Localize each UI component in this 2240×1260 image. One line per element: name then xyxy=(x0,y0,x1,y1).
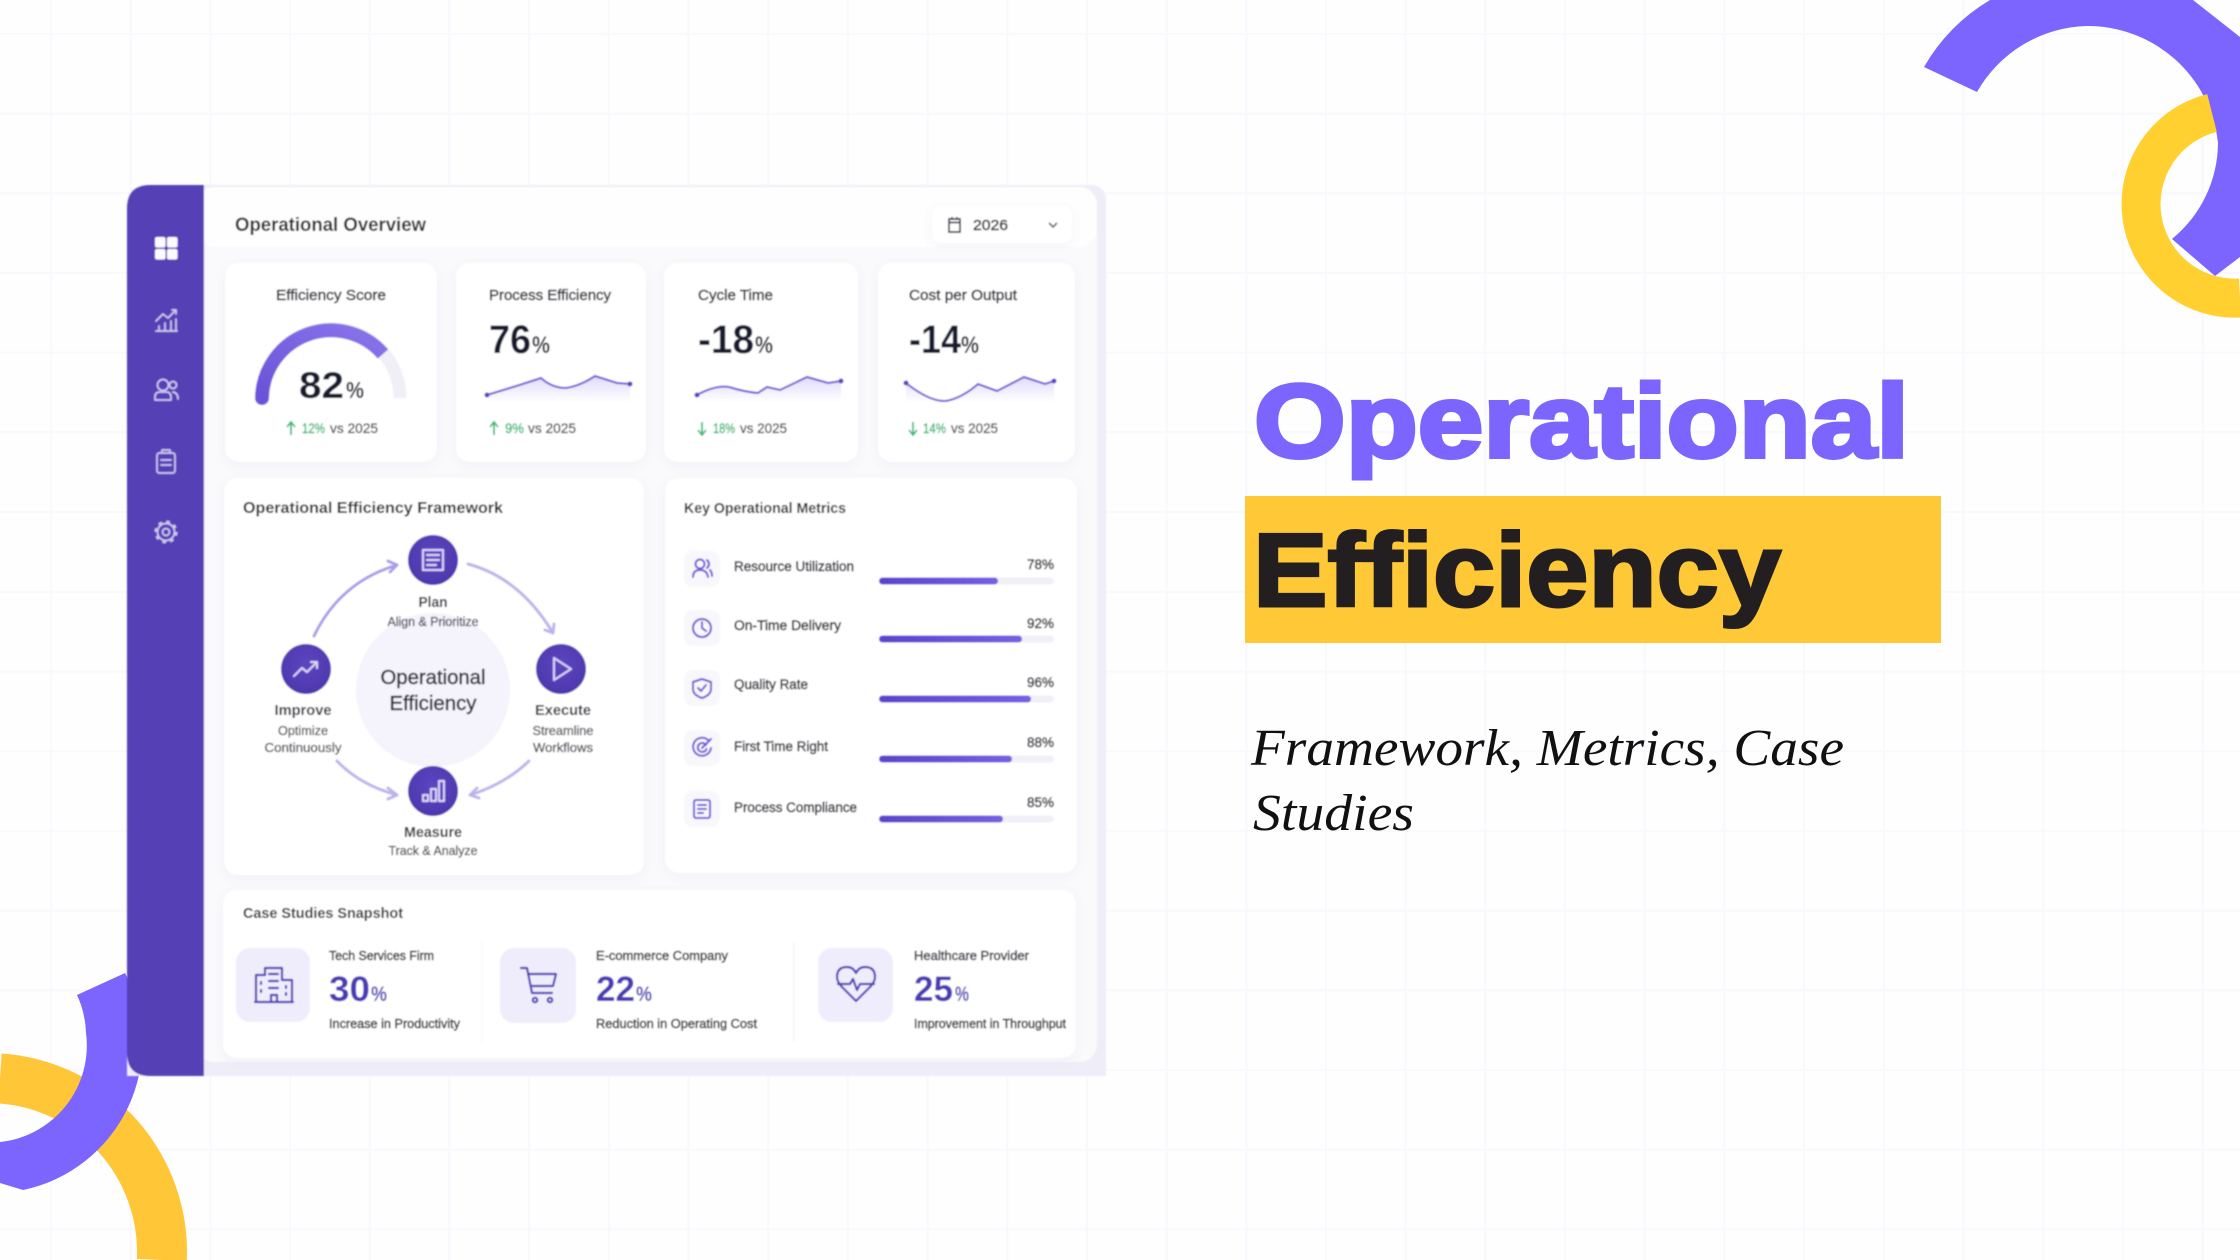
sidebar icon: gear xyxy=(156,522,176,542)
card: cost per output: Cost per Output xyxy=(909,287,1018,304)
metrics heading: Key Operational Metrics xyxy=(684,500,846,517)
gauge: 82 xyxy=(299,365,344,406)
card: cost per output xyxy=(878,263,1075,462)
title: Operational: Operational xyxy=(1254,364,1909,480)
panel: case studies snapshot xyxy=(223,890,1076,1058)
change vs 2025: 12% xyxy=(302,420,325,436)
case: e-commerce company: 22 xyxy=(596,970,635,1009)
change vs 2025: 14% xyxy=(923,420,946,436)
node: measure: Measure xyxy=(404,824,462,841)
metric: resource utilization: 78% xyxy=(1027,557,1054,572)
node: execute: Streamline xyxy=(532,724,594,738)
panel: key operational metrics xyxy=(665,478,1077,873)
arrow: improve to plan xyxy=(314,561,397,636)
dashboard frame xyxy=(127,185,1106,1076)
node: execute xyxy=(532,644,594,755)
dashboard main area xyxy=(196,187,1097,1062)
change vs 2025 xyxy=(287,420,378,436)
case: healthcare provider: Improvement in Throughput xyxy=(914,1016,1066,1031)
panel: framework xyxy=(224,478,644,875)
case: e-commerce company: % xyxy=(636,983,652,1006)
change vs 2025 xyxy=(490,420,576,436)
metric: resource utilization xyxy=(684,551,1054,587)
subtitle xyxy=(1250,720,1844,842)
node: measure: Track & Analyze xyxy=(388,844,478,858)
dashboard heading: Operational Overview xyxy=(235,215,426,236)
metric: first time right: First Time Right xyxy=(734,739,828,754)
node: improve xyxy=(264,644,342,755)
framework heading: Operational Efficiency Framework xyxy=(243,500,503,517)
case: healthcare provider: % xyxy=(955,983,969,1006)
case: tech services firm xyxy=(236,948,460,1031)
metric: first time right: 88% xyxy=(1027,735,1054,750)
card: process efficiency xyxy=(456,263,646,462)
metric: process compliance: Process Compliance xyxy=(734,800,857,815)
title highlight: Efficiency xyxy=(1245,496,1941,643)
sparkline xyxy=(694,377,844,402)
node: improve: Improve xyxy=(274,702,332,719)
case: tech services firm: Increase in Productivity xyxy=(329,1016,460,1031)
change vs 2025: vs 2025 xyxy=(740,420,787,436)
node: improve: Continuously xyxy=(264,741,342,755)
card: process efficiency: Process Efficiency xyxy=(489,287,611,304)
arrow: execute to measure xyxy=(470,761,529,798)
node: plan: Align & Prioritize xyxy=(388,615,479,629)
metric: quality rate: 96% xyxy=(1027,675,1054,690)
change vs 2025: 9% xyxy=(505,420,524,436)
node: execute: Workflows xyxy=(533,741,593,755)
arrow: improve to measure xyxy=(337,761,397,799)
centre circle xyxy=(356,613,510,767)
change vs 2025 xyxy=(698,420,787,436)
subtitle: Studies xyxy=(1253,785,1414,842)
change vs 2025: vs 2025 xyxy=(951,420,998,436)
metric: on-time delivery: 92% xyxy=(1027,616,1054,631)
metric: first time right xyxy=(684,730,1054,766)
card: process efficiency: 76 xyxy=(489,318,531,362)
case: healthcare provider: Healthcare Provider xyxy=(914,948,1030,963)
metric: quality rate xyxy=(684,670,1054,706)
sparkline xyxy=(484,376,632,402)
case: healthcare provider xyxy=(818,948,1066,1031)
decoration: bottom-left yellow arc xyxy=(0,1078,162,1260)
year selector: 2026 xyxy=(973,217,1008,234)
case: e-commerce company: Reduction in Operating Cost xyxy=(596,1016,757,1031)
metric: process compliance xyxy=(684,791,1054,827)
change vs 2025: vs 2025 xyxy=(330,420,378,436)
card: process efficiency: % xyxy=(532,332,550,359)
change vs 2025 xyxy=(909,420,998,436)
card: cost per output: % xyxy=(961,332,979,359)
card: cycle time: -18 xyxy=(698,318,754,362)
metric: resource utilization: Resource Utilization xyxy=(734,559,854,574)
case: e-commerce company xyxy=(500,948,757,1031)
sidebar icon: chart xyxy=(156,310,177,331)
dashboard screenshot xyxy=(127,185,1106,1076)
case: e-commerce company: E-commerce Company xyxy=(596,948,728,963)
card: efficiency score: Efficiency Score xyxy=(276,287,386,304)
case studies heading: Case Studies Snapshot xyxy=(243,905,403,922)
sidebar icon: people xyxy=(155,380,178,400)
card: efficiency score xyxy=(225,263,437,462)
year selector xyxy=(932,206,1072,243)
card: cost per output: -14 xyxy=(909,318,962,362)
node: execute: Execute xyxy=(535,702,591,719)
sparkline xyxy=(904,377,1056,402)
node: improve: Optimize xyxy=(278,724,328,738)
decoration: top-right yellow arc xyxy=(2141,113,2240,298)
change vs 2025: vs 2025 xyxy=(528,420,576,436)
sidebar icon: grid xyxy=(155,237,178,260)
subtitle: Framework, Metrics, Case xyxy=(1250,720,1844,777)
case: tech services firm: Tech Services Firm xyxy=(329,948,434,963)
centre circle: Operational xyxy=(380,667,486,689)
decoration: bottom-left purple arc xyxy=(0,973,142,1190)
metric: process compliance: 85% xyxy=(1027,795,1054,810)
case: healthcare provider: 25 xyxy=(914,970,953,1009)
card: cycle time: % xyxy=(755,332,773,359)
arrow: plan to execute xyxy=(468,564,554,633)
case: tech services firm: % xyxy=(371,983,387,1006)
metric: quality rate: Quality Rate xyxy=(734,677,808,692)
centre circle: Efficiency xyxy=(390,693,476,715)
decoration: top-right purple arc xyxy=(1924,0,2240,276)
node: plan xyxy=(388,535,479,629)
metric: on-time delivery: On-Time Delivery xyxy=(734,618,841,633)
node: measure xyxy=(388,766,478,858)
metric: on-time delivery xyxy=(684,610,1054,646)
change vs 2025: 18% xyxy=(713,420,735,436)
node: plan: Plan xyxy=(418,594,448,611)
sidebar icon: clipboard xyxy=(157,450,175,473)
title highlight: Efficiency: Efficiency xyxy=(1253,513,1781,629)
card: cycle time xyxy=(664,263,858,462)
card: cycle time: Cycle Time xyxy=(698,287,773,304)
gauge: % xyxy=(346,377,364,403)
case: tech services firm: 30 xyxy=(329,970,370,1009)
gauge xyxy=(255,329,400,406)
sidebar xyxy=(127,185,204,1076)
